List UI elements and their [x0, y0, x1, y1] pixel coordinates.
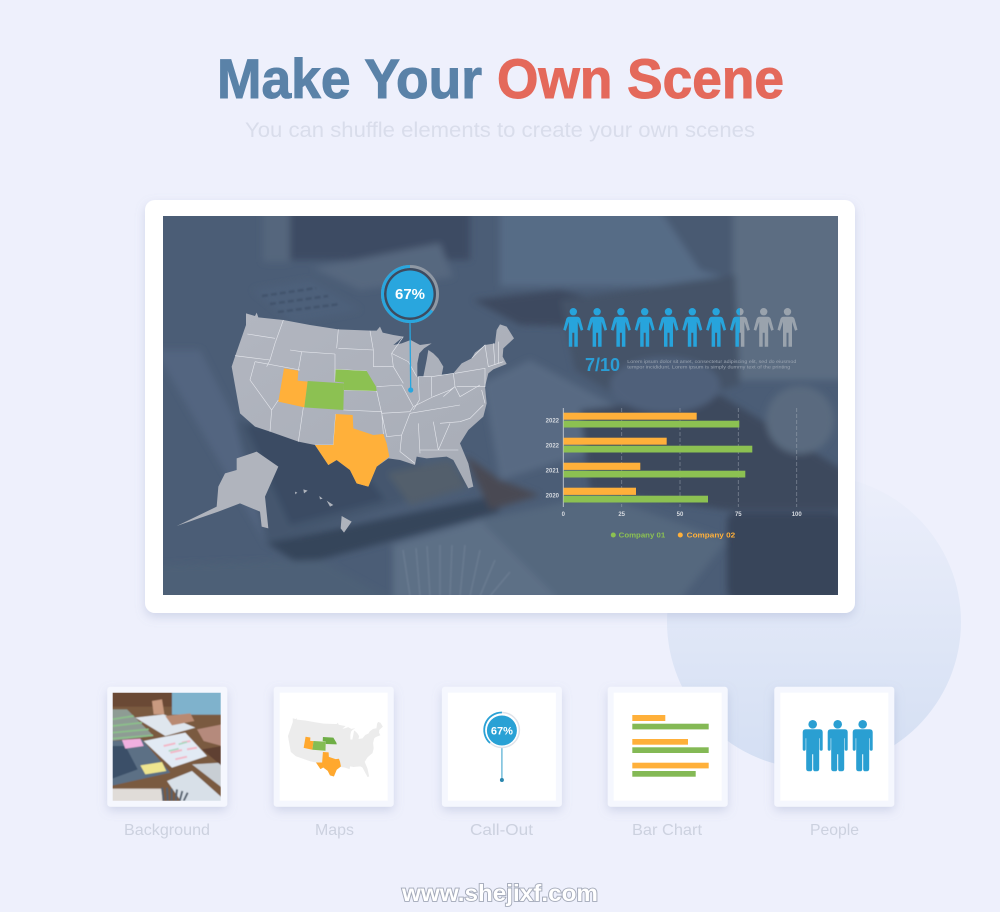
bars 2022 [564, 438, 752, 452]
map: Colorado [304, 381, 344, 410]
axis labels: 25 [618, 512, 626, 518]
map: Nebraska [335, 369, 377, 391]
callout 67%: 67% [395, 286, 425, 303]
background photo [155, 210, 843, 600]
thumbnail: call-out: 67% [491, 726, 513, 738]
thumbnail: maps [274, 687, 394, 807]
thumbnail: call-out [442, 687, 562, 807]
US map [177, 313, 514, 533]
stat description: tempor incididunt. Lorem ipsum is simply dummy text of the printing [627, 364, 791, 370]
label: maps: Maps [315, 822, 354, 839]
label: call-out: Call-Out [470, 822, 534, 839]
map: Texas [315, 414, 389, 487]
infographic canvas [104, 57, 961, 907]
map: Alaska [177, 452, 278, 528]
decorative circle [667, 475, 961, 769]
7/10 stat: 7/10 [585, 355, 620, 375]
stat description: Lorem ipsum dolor sit amet, consectetur adipiscing elit, sed do eiusmod [627, 359, 797, 364]
thumbnail: people [774, 687, 894, 807]
thumbnail: bar chart [608, 687, 728, 807]
legend: Company 02 [687, 531, 735, 540]
title: Own Scene [497, 47, 784, 110]
map: contiguous states [232, 313, 514, 488]
main scene card [145, 200, 855, 613]
legend [611, 531, 735, 540]
title [217, 47, 784, 110]
map: Utah [278, 368, 308, 407]
label: background: Background [124, 822, 210, 839]
bars 2022 top [564, 413, 739, 428]
axis labels: 100 [792, 512, 802, 518]
axis labels: 0 [562, 512, 566, 518]
legend: Company 01 [619, 531, 665, 540]
bars 2021 [564, 463, 745, 478]
label: people: People [810, 822, 859, 839]
callout 67% [382, 266, 438, 393]
label: bar chart: Bar Chart [632, 822, 703, 839]
axis labels: 50 [677, 512, 684, 518]
bars 2020 [564, 488, 708, 502]
title: Make Your [217, 47, 482, 110]
year labels: 2022 [546, 444, 560, 450]
year labels: 2021 [546, 468, 560, 474]
thumbnail: background [107, 687, 227, 807]
subtitle: You can shuffle elements to create your own scenes [245, 119, 755, 142]
map: state borders [235, 320, 503, 463]
stat description [627, 359, 797, 370]
people pictogram row [563, 308, 798, 347]
year labels [546, 418, 560, 500]
map: Hawaii [295, 489, 352, 533]
bar chart [546, 408, 802, 540]
watermark: www.shejixf.com [401, 880, 598, 906]
year labels: 2022 [546, 418, 560, 424]
axis labels [562, 512, 802, 518]
axis labels: 75 [735, 512, 742, 518]
year labels: 2020 [546, 494, 560, 500]
